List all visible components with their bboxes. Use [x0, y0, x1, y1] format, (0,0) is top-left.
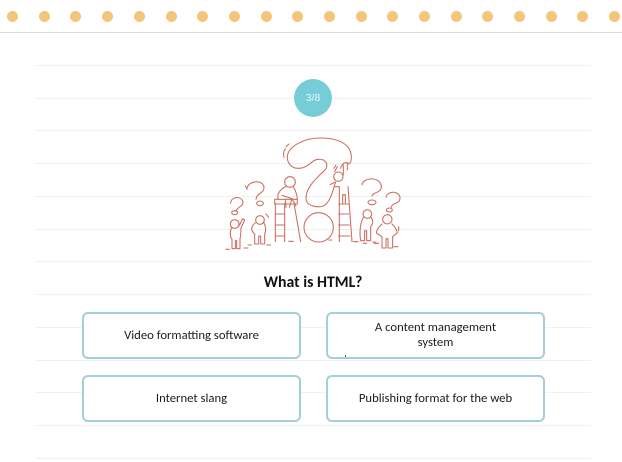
- answer option: internet slang: Internet slang: [156, 391, 227, 406]
- header strip with binder dots: [0, 0, 622, 33]
- icon: far-right person with hands on hips and question mark: [374, 192, 400, 248]
- answer option: video formatting software: Video formatting software: [124, 328, 259, 343]
- progress badge 3/8: [294, 79, 332, 117]
- icon: right thinking person and question mark: [360, 179, 381, 243]
- illustration: people and question marks: [226, 138, 400, 250]
- question heading: What is HTML?: [264, 273, 362, 292]
- answer option: publishing format: [326, 375, 545, 422]
- icon: giant question mark: [284, 138, 351, 242]
- small speck in option box: [345, 355, 346, 356]
- answer option: content management system: system: [418, 335, 453, 350]
- icon: left ladder with sitting person: [275, 177, 301, 242]
- answer option: video formatting software: [82, 312, 301, 359]
- answer option: content management system: A content management: [375, 320, 496, 335]
- icon: thinking person and question mark: [245, 182, 271, 245]
- icon: right ladder with climbing person: [329, 163, 358, 242]
- answer option: internet slang: [82, 375, 301, 422]
- answer option: publishing format: Publishing format for the web: [359, 391, 512, 406]
- answer option: content management system: [326, 312, 545, 359]
- progress badge 3/8: 3/8: [306, 92, 320, 104]
- icon: person with raised hand and question mark, far left: [226, 198, 248, 249]
